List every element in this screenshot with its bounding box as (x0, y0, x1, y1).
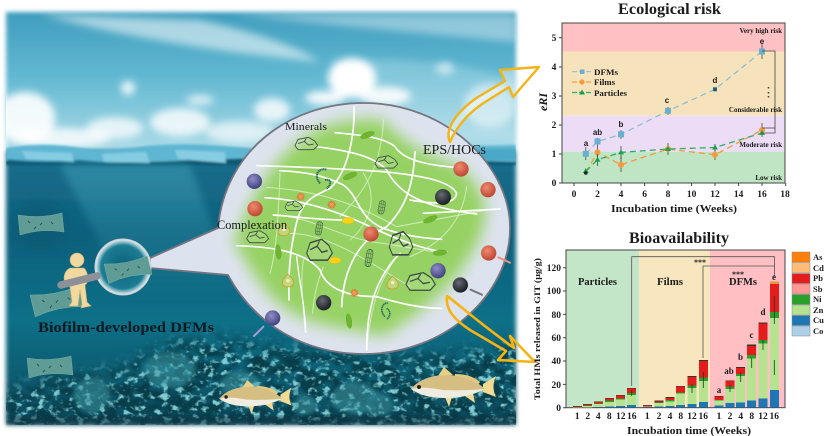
x tick labels: 12 (758, 412, 768, 422)
risk zone labels: Very high risk (739, 27, 782, 35)
clouds (0, 14, 516, 148)
fish right (411, 367, 496, 407)
y tick labels: 100 (547, 287, 561, 297)
bacteria rods (275, 130, 447, 329)
water surface (6, 144, 516, 165)
x tick labels: 16 (699, 412, 708, 422)
legend (572, 68, 627, 98)
y tick labels: 20 (552, 381, 561, 391)
series: Films (586, 123, 765, 172)
legend: metals: Zn (813, 305, 824, 315)
significance letters: a (584, 139, 589, 148)
group bands (566, 250, 785, 408)
x tick labels: 6 (642, 190, 647, 200)
label: Biofilm-developed DFMs: Biofilm-developed DFMs (38, 320, 214, 336)
group labels: Particles (578, 277, 617, 288)
ion trails (254, 257, 510, 336)
x tick labels: 4 (738, 412, 743, 422)
x tick labels: 16 (757, 190, 767, 200)
biofilm network (233, 107, 510, 350)
significance letters: c (665, 96, 670, 105)
yellow granules (329, 217, 354, 264)
label: Complexation: Complexation (217, 218, 288, 232)
bubble outline and pale background (150, 103, 510, 354)
bar letters: a (717, 385, 722, 395)
group labels: Films (657, 277, 683, 288)
bar letters: c (750, 330, 754, 340)
group labels: DFMs (729, 277, 757, 288)
y axis title: Total HMs released in GIT (μg/g) (532, 258, 542, 400)
x tick labels: 1 (645, 412, 650, 422)
x tick labels: 0 (572, 190, 577, 200)
x tick labels (575, 412, 779, 422)
figure holding magnifier (61, 253, 97, 308)
significance bracket (762, 51, 775, 133)
legend: metals (792, 252, 824, 336)
y tick labels: 5 (552, 34, 557, 44)
significance marks (694, 258, 744, 279)
y tick labels: 1 (552, 150, 557, 160)
legend: Particles (594, 89, 627, 98)
coral reef (6, 330, 516, 425)
underwater light rays (61, 162, 214, 256)
y tick labels: 0 (556, 404, 561, 414)
x tick labels (572, 190, 790, 200)
minerals (247, 137, 435, 290)
significance letters: e (760, 37, 765, 46)
y tick labels (547, 264, 561, 414)
legend: metals: Cu (813, 315, 824, 325)
panel: ecological risk chart (536, 1, 790, 215)
bar letters: e (772, 272, 776, 282)
label: Minerals: Minerals (285, 122, 327, 133)
bar error marks (632, 296, 774, 396)
y tick labels: 3 (552, 92, 557, 102)
x tick labels: 2 (728, 412, 733, 422)
legend: metals: Co (813, 326, 823, 336)
risk zone labels: Low risk (755, 174, 782, 182)
panel: bioavailability chart (532, 230, 824, 436)
x tick labels: 8 (749, 412, 754, 422)
x axis title: Incubation time (Weeks) (611, 203, 737, 215)
magnifier lens (95, 239, 152, 295)
axes frame (559, 23, 786, 186)
bar letters: ab (724, 366, 734, 376)
significance letters (584, 37, 765, 148)
legend: DFMs (594, 68, 618, 77)
bar letters: d (760, 307, 766, 317)
axes frame (563, 250, 785, 408)
x tick labels: 10 (687, 190, 697, 200)
risk zone labels: Considerable risk (729, 106, 782, 114)
x tick labels: 4 (619, 190, 624, 200)
risk bands (562, 23, 785, 183)
x tick labels: 2 (585, 412, 590, 422)
x tick labels: 2 (595, 190, 600, 200)
magnifier callout bubble (150, 103, 510, 354)
significance marks: *** (694, 258, 706, 267)
x tick labels: 12 (616, 412, 626, 422)
significance marks: *** (732, 270, 744, 279)
y tick labels: 40 (552, 357, 561, 367)
scene background: ocean and sky (0, 12, 530, 430)
x tick labels: 4 (668, 412, 673, 422)
legend: Films (594, 78, 615, 87)
x tick labels: 18 (780, 190, 790, 200)
x tick labels: 14 (734, 190, 744, 200)
bar letters (717, 272, 776, 395)
x tick labels: 4 (596, 412, 601, 422)
icon: floating film upper left (13, 200, 67, 252)
arrow to ecological risk (448, 67, 539, 142)
risk zone labels (729, 27, 782, 182)
risk zone labels: Moderate risk (739, 141, 782, 149)
heading: Ecological risk: Ecological risk (618, 1, 721, 18)
x tick labels: 2 (657, 412, 662, 422)
x tick labels: 8 (607, 412, 612, 422)
x tick labels: 1 (575, 412, 580, 422)
series: Particles (583, 130, 765, 175)
fish left (219, 380, 292, 414)
y axis title: eRI (536, 92, 550, 111)
y tick labels (552, 34, 557, 189)
legend: metals: As (813, 252, 823, 262)
icon: film held by figure (30, 286, 84, 317)
icon: floating film lower left (27, 356, 73, 378)
x tick labels: 1 (717, 412, 722, 422)
bar letters: b (738, 352, 743, 362)
significance letters: ab (593, 128, 602, 137)
legend: metals: Sb (813, 284, 823, 294)
x tick labels: 16 (627, 412, 637, 422)
group labels (578, 277, 757, 288)
x tick labels: 12 (687, 412, 697, 422)
x tick labels: 12 (710, 190, 720, 200)
y tick labels: 60 (552, 334, 561, 344)
x tick labels: 16 (770, 412, 779, 422)
y tick labels: 2 (552, 121, 557, 131)
heading: Bioavailability: Bioavailability (629, 230, 729, 247)
microbes (278, 169, 398, 319)
y tick labels: 120 (547, 264, 561, 274)
significance brackets (632, 257, 774, 386)
y tick labels: 0 (552, 179, 557, 189)
x tick labels: 8 (678, 412, 683, 422)
significance letters: b (619, 120, 624, 129)
arrow to bioavailability (447, 296, 535, 362)
legend: metals: Cd (813, 263, 824, 273)
y tick labels: 80 (552, 311, 561, 321)
metal ions (247, 161, 496, 326)
legend: metals: Ni (813, 294, 822, 304)
label: EPS/HOCs: EPS/HOCs (423, 142, 486, 157)
y tick labels: 4 (552, 63, 557, 73)
x tick labels: 8 (666, 190, 671, 200)
stacked bars (573, 282, 779, 408)
series: DFMs (583, 44, 765, 160)
significance letters: d (713, 76, 718, 85)
legend: metals: Pb (813, 273, 823, 283)
